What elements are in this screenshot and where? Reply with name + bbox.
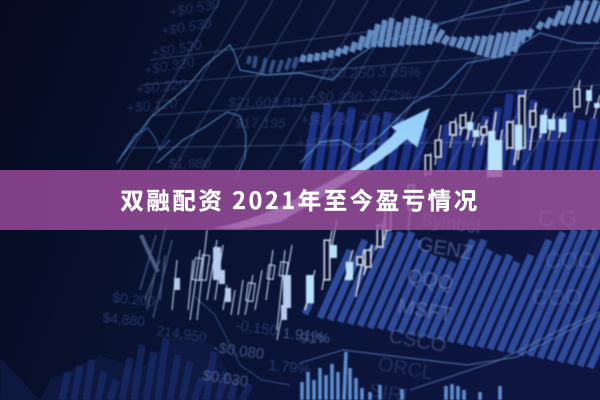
faint lower values: 91% — [300, 330, 330, 347]
ticker symbols: Symbol — [419, 209, 482, 237]
top right histogram — [248, 0, 600, 73]
mid dark blue bars behind candles — [306, 90, 600, 172]
ticker symbols: COO — [532, 285, 582, 310]
perspective grid lines — [120, 0, 600, 170]
faint lower values: 1.79% — [268, 357, 312, 378]
faint dollar and percent values: +$0.250 — [320, 65, 375, 82]
candlesticks upper right and center — [305, 80, 600, 310]
faint lower values: 214,950 — [156, 322, 208, 345]
ticker symbols: COO — [545, 248, 595, 273]
faint dollar and percent values: $17,195 — [234, 115, 286, 131]
faint lower values: -$0.080 — [212, 339, 265, 363]
ticker symbols: C G — [538, 206, 577, 231]
ticker symbols: QQQ — [405, 265, 455, 295]
faint dollar and percent values: +$0.320 — [143, 53, 196, 78]
ticker symbols — [367, 206, 595, 400]
lower histogram — [302, 352, 500, 400]
candlesticks lower left bright — [172, 230, 292, 340]
bottom left faint volume bars — [0, 335, 250, 400]
faint dollar and percent values: 3.72% — [369, 87, 412, 104]
faint dollar and percent values: +$0.1 — [296, 135, 334, 152]
faint dollar and percent values: +$0.230 — [308, 89, 363, 106]
faint lower values: $0.200 — [112, 289, 156, 309]
faint dollar and percent values: +$0.530 — [160, 14, 213, 39]
faint dollar and percent values: +$0.220 — [135, 76, 187, 97]
faint dollar and percent values: +$0.130 — [300, 112, 355, 129]
title: 双融配资 2021年至今盈亏情况 — [120, 182, 480, 216]
faint lower values: $4,880 — [102, 309, 146, 329]
faint dollar and percent values: +$0.520 — [150, 36, 203, 61]
main blue bars lower right — [305, 230, 600, 368]
title band — [0, 170, 600, 230]
faint dollar and percent values: 3.5% — [355, 135, 389, 152]
faint dollar and percent values — [126, 0, 421, 171]
line charts — [117, 0, 600, 390]
ticker symbols: GENZ — [416, 233, 475, 265]
ticker symbols: CSCO — [387, 325, 448, 357]
ticker symbols: ORCL — [376, 353, 435, 385]
faint dollar and percent values: $1,980 — [167, 155, 211, 171]
faint dollar and percent values: $21,603,811 — [227, 94, 305, 110]
faint lower values: 1.91% — [282, 325, 326, 346]
ticker symbols: MSFT — [396, 295, 454, 326]
faint lower values: -0.150 — [234, 317, 279, 340]
rising arrow — [212, 108, 430, 229]
faint dollar and percent values: +$0.120 — [126, 95, 178, 116]
faint lower values — [102, 289, 330, 390]
faint dollar and percent values: 3.85% — [378, 64, 421, 81]
faint dollar and percent values: 3.61% — [360, 110, 403, 127]
candlesticks lower left faint — [140, 225, 172, 318]
faint lower values: $0.030 — [201, 367, 249, 390]
